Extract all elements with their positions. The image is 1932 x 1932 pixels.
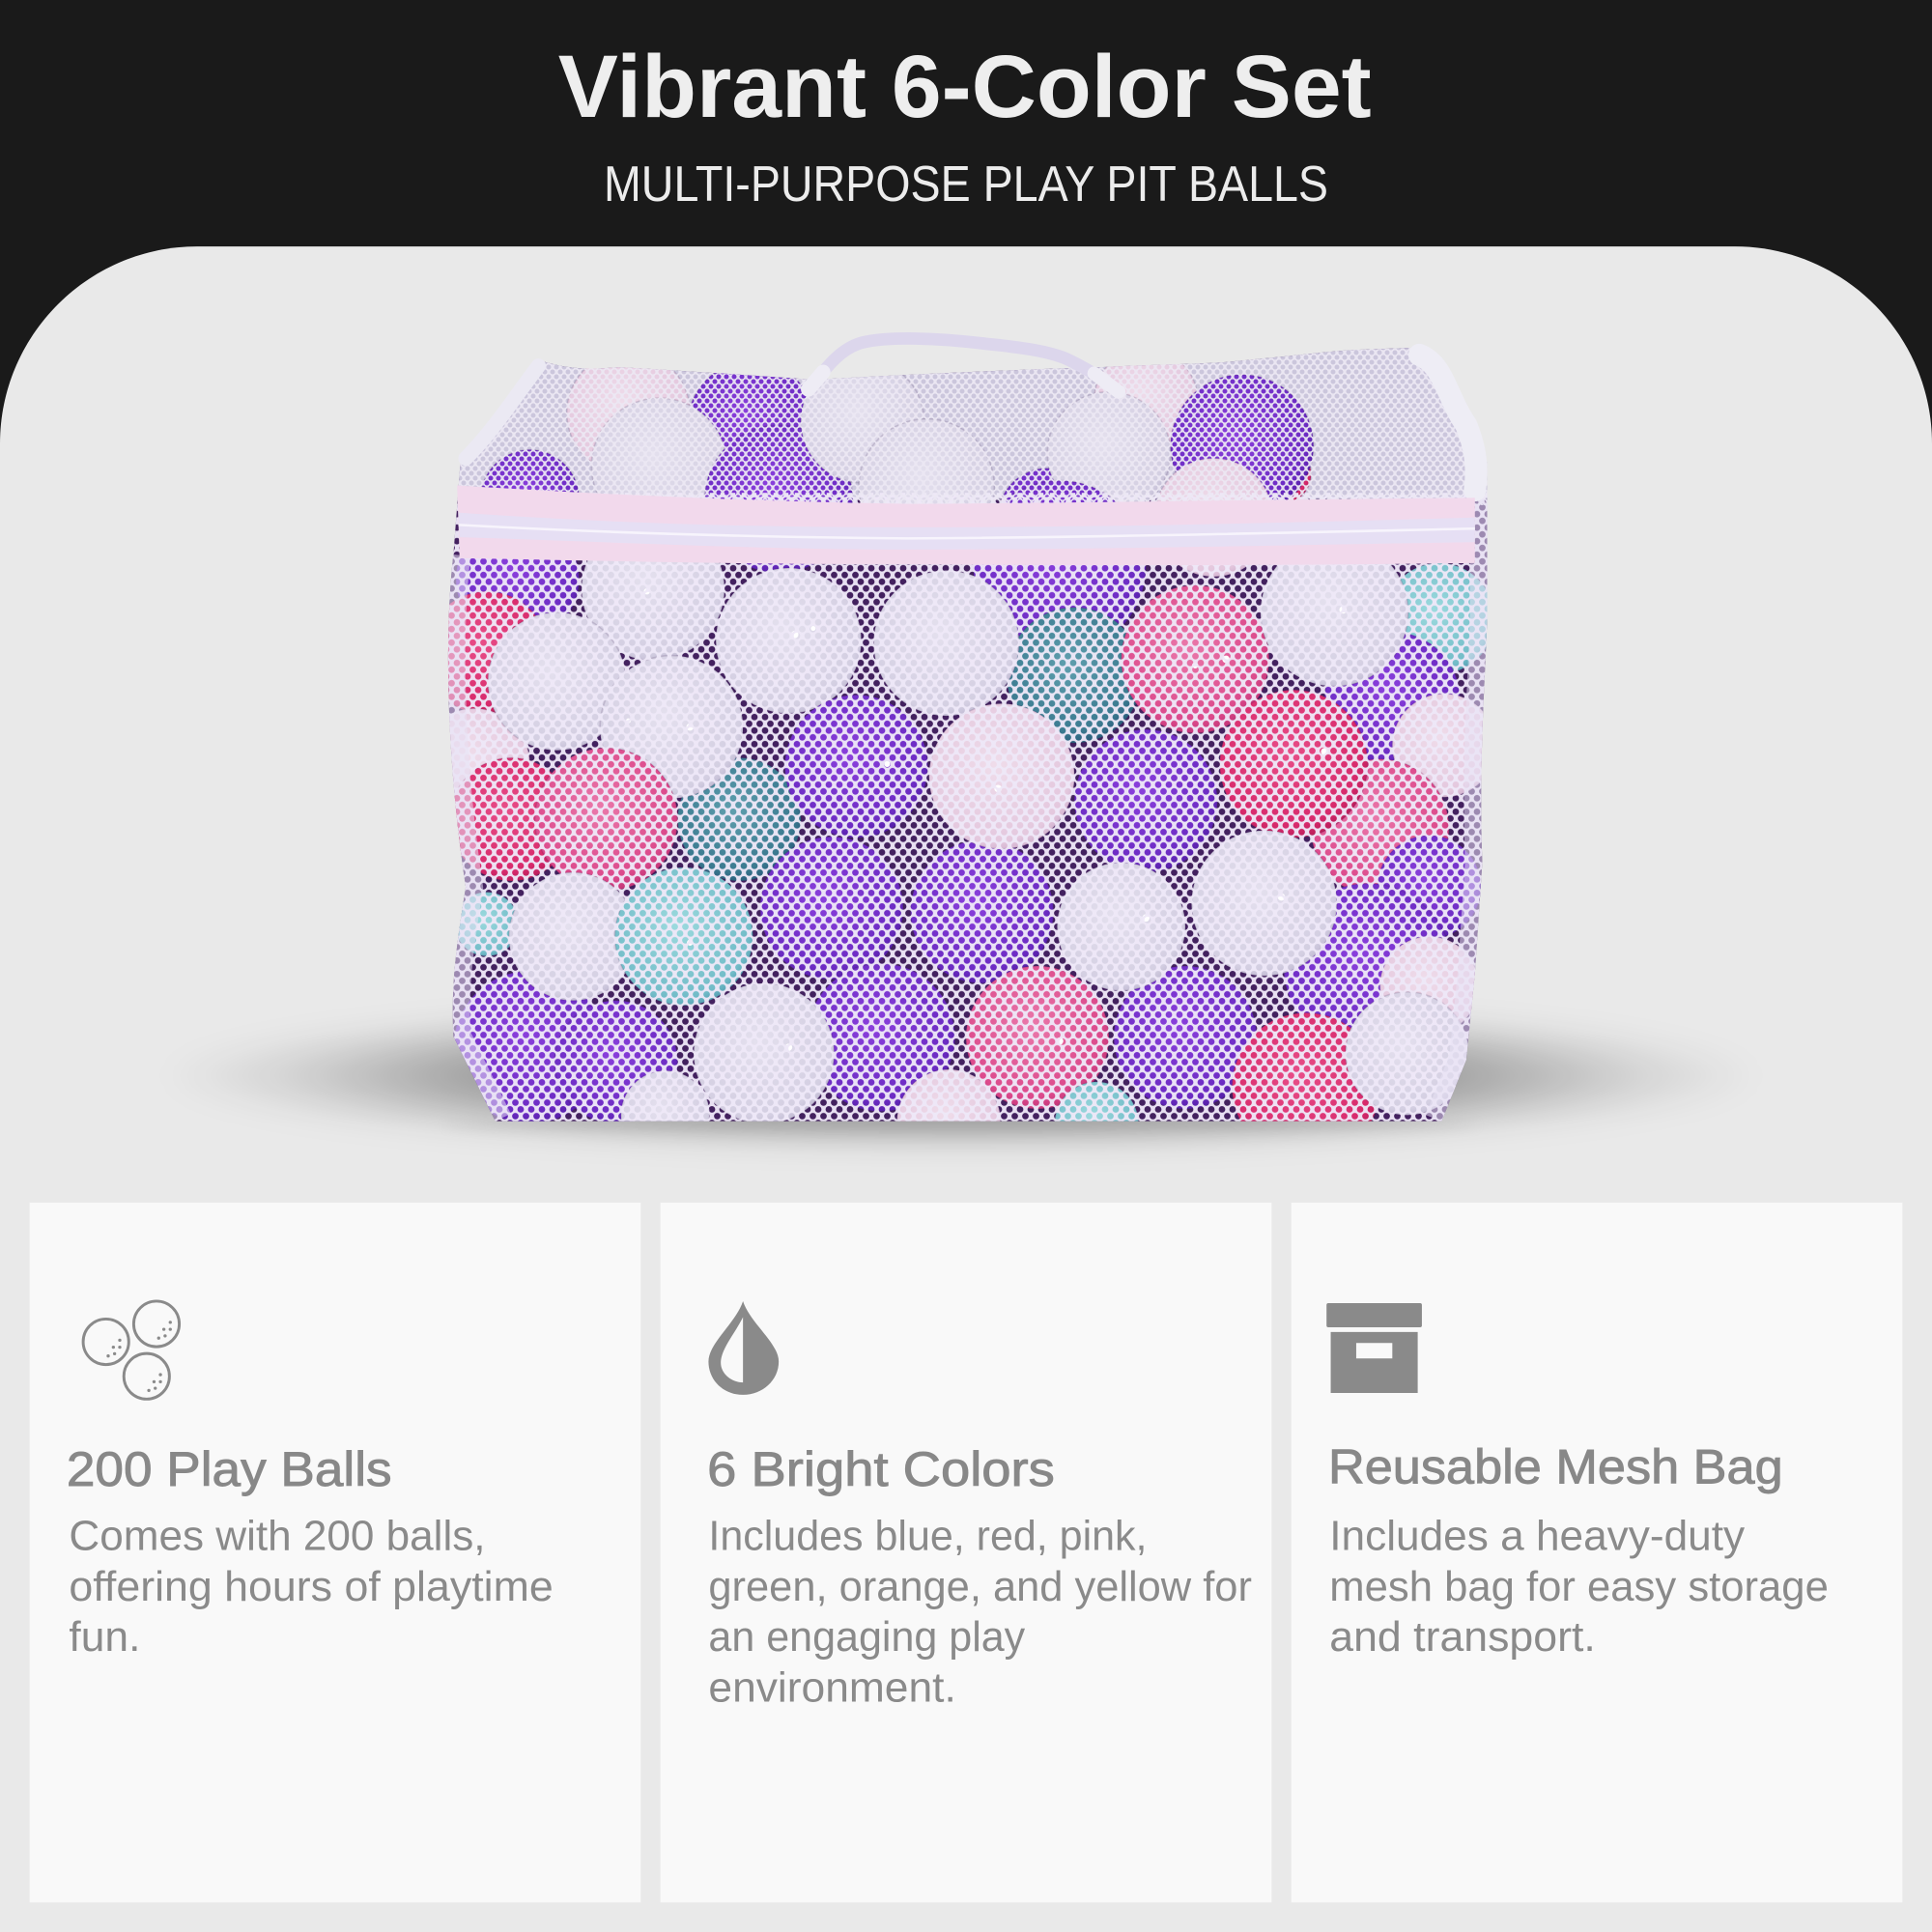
body text: environment. [708, 1664, 956, 1711]
heading: 200 Play Balls [67, 1442, 392, 1496]
mesh netting: front [419, 493, 1528, 1133]
icon: water drop [708, 1301, 779, 1395]
sparkles [626, 588, 1347, 1051]
panel: card 2, bright colors [661, 1203, 1271, 1902]
icon: storage box [1326, 1303, 1422, 1393]
bag side haze [448, 499, 1488, 1122]
body text [69, 1514, 554, 1661]
panel: card 3, mesh bag [1292, 1203, 1902, 1902]
heading: 6 Bright Colors [707, 1442, 1055, 1496]
body text: mesh bag for easy storage [1329, 1564, 1829, 1610]
panel: card 1, play balls [30, 1203, 640, 1902]
body text: offering hours of playtime [69, 1564, 554, 1610]
body text: and transport. [1329, 1614, 1596, 1661]
heading: Reusable Mesh Bag [1328, 1440, 1783, 1494]
body text: an engaging play [708, 1614, 1026, 1661]
body text: fun. [69, 1614, 140, 1661]
floor shadow [160, 999, 1762, 1152]
icon: three balls [83, 1301, 180, 1399]
body text [1329, 1514, 1829, 1661]
body text: Includes a heavy-duty [1329, 1514, 1745, 1560]
fabric corner left [466, 366, 538, 458]
balls inside bag [448, 348, 1488, 1122]
zipper band [457, 486, 1475, 565]
body text: green, orange, and yellow for [708, 1564, 1252, 1610]
mesh netting: top [457, 348, 1488, 505]
body text: Comes with 200 balls, [69, 1514, 486, 1560]
body text [708, 1514, 1252, 1711]
title: Vibrant 6-Color Set [558, 38, 1372, 136]
product: mesh bag of play balls [448, 332, 1488, 1122]
subtitle: MULTI-PURPOSE PLAY PIT BALLS [604, 156, 1328, 213]
fabric corner right [1419, 355, 1476, 491]
icon: bag handle [809, 338, 1119, 392]
body text: Includes blue, red, pink, [708, 1514, 1147, 1560]
